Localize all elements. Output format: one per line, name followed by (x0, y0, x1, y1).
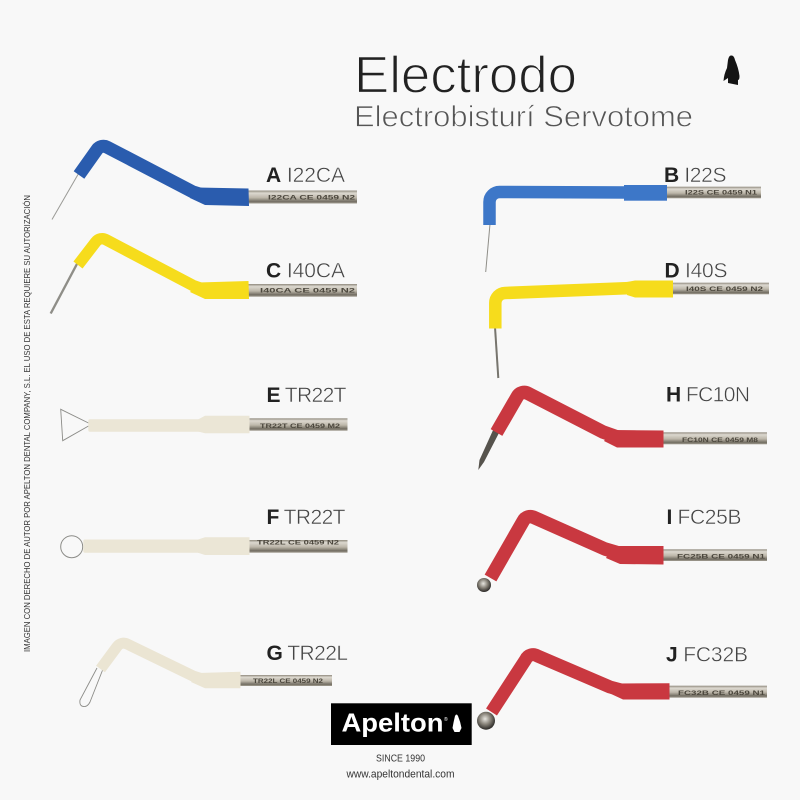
I instrument (477, 517, 767, 592)
electrode F (61, 506, 347, 558)
B label: B I22S (664, 164, 726, 187)
J label: J FC32B (666, 644, 748, 666)
icon: penguin (724, 55, 740, 85)
D instrument: I40S CE 0459 N2 (686, 286, 764, 293)
logo registered mark: ® (444, 716, 448, 723)
F instrument (61, 536, 347, 558)
electrode D (495, 260, 769, 378)
title: Electrodo (354, 46, 577, 104)
electrode C (51, 239, 357, 314)
copyright note: IMAGEN CON DERECHO DE AUTOR POR APELTON DENTAL COMPANY, S.L. EL USO DE ESTA REQUIERE SU AUTORIZACIÓN (22, 195, 32, 652)
electrode B (486, 164, 761, 272)
electrode H (478, 384, 767, 470)
G instrument (80, 643, 332, 707)
electrode E (61, 384, 347, 441)
D label: D I40S (664, 260, 728, 282)
C instrument (51, 239, 357, 314)
J instrument (477, 655, 767, 730)
C instrument: I40CA CE 0459 N2 (260, 288, 356, 294)
E instrument: TR22T CE 0459 M2 (260, 423, 341, 430)
logo: Apelton (331, 703, 472, 745)
electrode A (52, 146, 357, 220)
H instrument (478, 392, 767, 470)
H instrument: FC10N CE 0459 M8 (682, 437, 758, 444)
icon: logo penguin (452, 714, 462, 732)
G label: G TR22L (266, 642, 348, 665)
A label: A I22CA (266, 164, 345, 187)
subtitle: Electrobisturí Servotome (354, 100, 693, 134)
F label: F TR22T (266, 506, 346, 529)
E instrument (61, 409, 347, 441)
H label: H FC10N (666, 384, 750, 406)
electrode I (477, 506, 767, 592)
I label: I FC25B (666, 506, 742, 529)
electrode G (80, 642, 348, 707)
website: www.apeltondental.com (346, 768, 454, 780)
electrode J (477, 644, 767, 730)
I instrument: FC25B CE 0459 N1 (677, 554, 766, 560)
D instrument (495, 280, 769, 378)
B instrument (486, 185, 761, 272)
E label: E TR22T (266, 384, 347, 407)
C label: C I40CA (266, 260, 345, 282)
B instrument: I22S CE 0459 N1 (685, 190, 758, 196)
G instrument: TR22L CE 0459 N2 (253, 678, 323, 685)
A instrument: I22CA CE 0459 N2 (268, 194, 356, 202)
F instrument: TR22L CE 0459 N2 (257, 540, 340, 546)
logo wordmark: Apelton (342, 708, 444, 738)
J instrument: FC32B CE 0459 N1 (678, 690, 766, 697)
since line: SINCE 1990 (376, 754, 425, 764)
A instrument (52, 146, 357, 220)
